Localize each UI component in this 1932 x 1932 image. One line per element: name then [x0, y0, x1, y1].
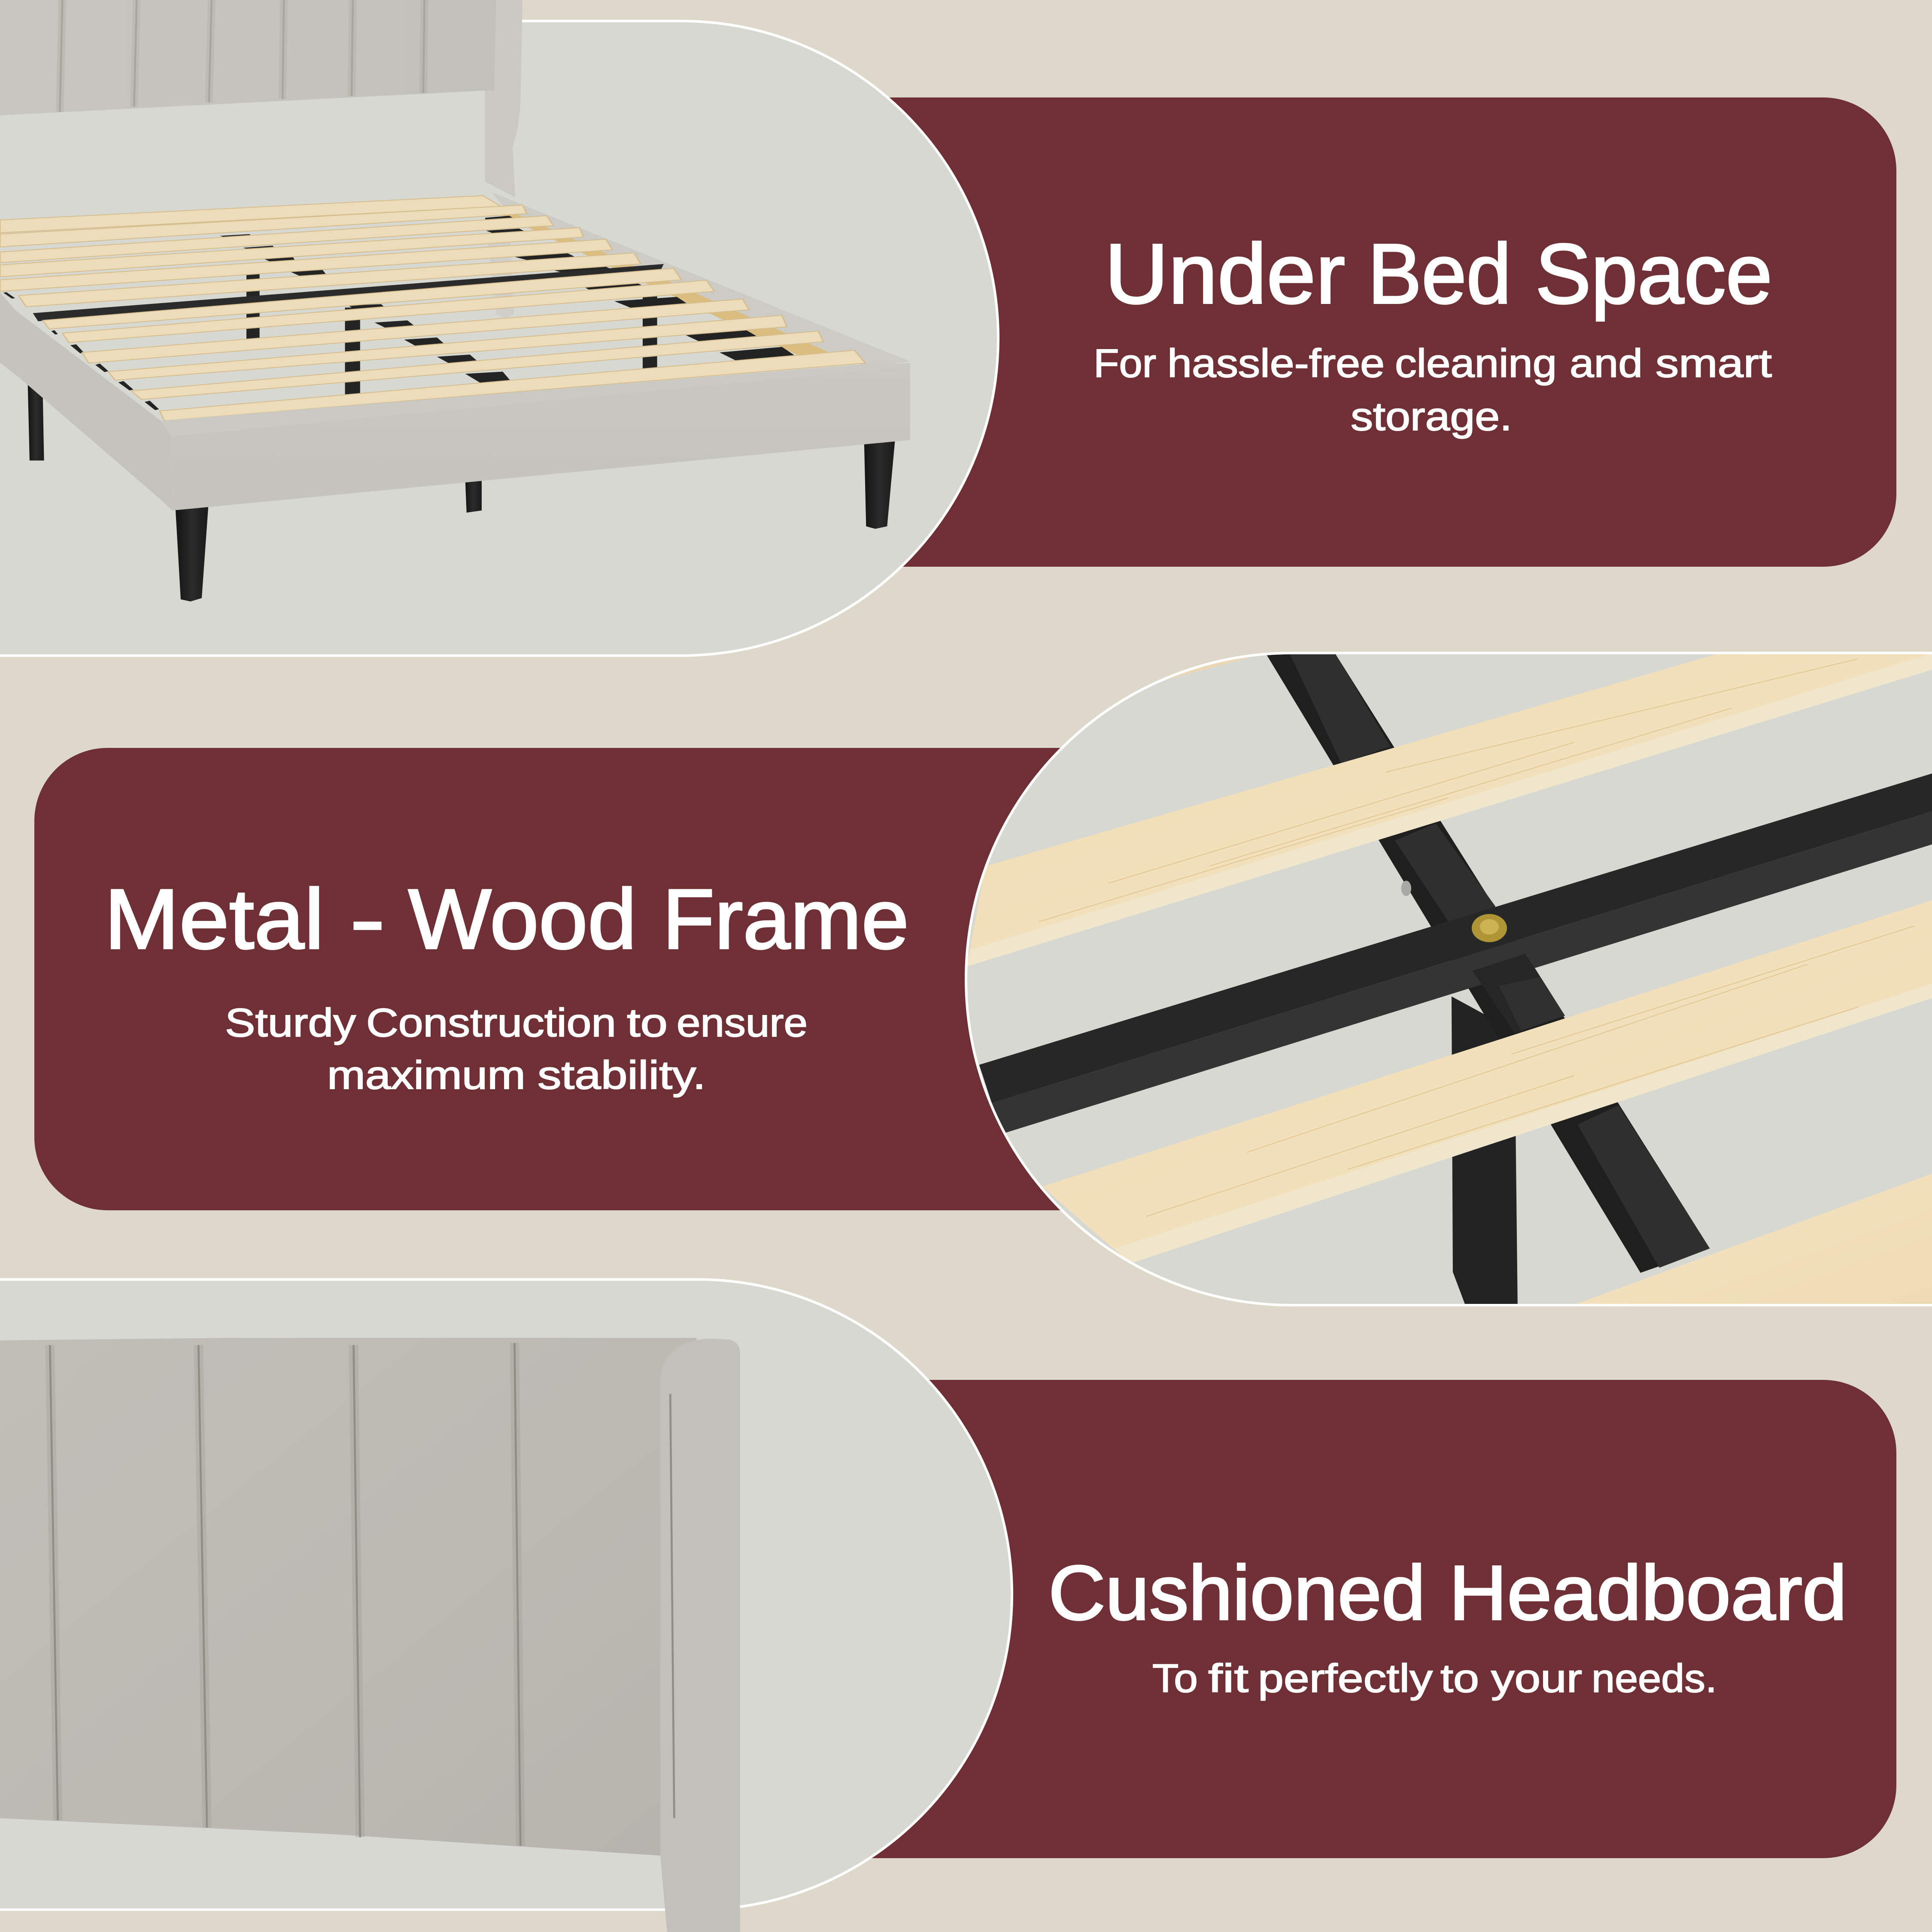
centre beam	[33, 264, 664, 321]
heading: under bed space: Under	[1105, 226, 1345, 321]
photo background	[967, 748, 1194, 1210]
panel: metal frame photo outline	[966, 653, 1932, 1305]
panel: metal frame photo	[966, 653, 1932, 1310]
headboard wing	[660, 1339, 740, 1932]
text: headboard description: your	[1491, 1656, 1582, 1701]
horizontal metal bar	[979, 773, 1932, 1133]
text: frame description line 2: maximum	[327, 1053, 526, 1097]
heading: metal wood frame: -	[350, 872, 385, 966]
top wood slat	[966, 653, 1932, 966]
heading: metal wood frame: Wood	[408, 872, 637, 966]
photo: bed frame with slats	[0, 0, 910, 601]
heading: under bed space	[1105, 226, 1772, 321]
front rail top surface	[161, 363, 910, 436]
side rail left	[0, 293, 172, 510]
text: headboard description: to	[1440, 1656, 1479, 1701]
dark rail blocks	[485, 216, 799, 362]
text: frame description line 1: ensure	[677, 1000, 808, 1045]
text: under bed description line 2: storage.	[1351, 394, 1512, 439]
headboard post lower	[484, 212, 514, 318]
text: headboard description: perfectly	[1258, 1656, 1433, 1701]
text: under bed description line 1	[1094, 341, 1772, 386]
diagonal metal bar	[1266, 653, 1710, 1273]
front rail	[171, 367, 910, 510]
wooden slats	[0, 196, 866, 421]
wood inner rail	[489, 210, 829, 355]
heading: metal wood frame	[104, 872, 909, 966]
panel: metal wood frame red card	[34, 748, 1194, 1210]
channel seams soft shading	[50, 1343, 520, 1846]
heading: under bed space: Bed	[1368, 226, 1511, 321]
heading: cushioned headboard	[1048, 1550, 1847, 1636]
bottom wood slat	[1558, 1174, 1932, 1310]
text: under bed description line 1: cleaning	[1395, 341, 1557, 386]
panel: under bed space red card	[773, 97, 1896, 567]
middle wood slat	[1042, 900, 1932, 1264]
heading: metal wood frame: Frame	[662, 872, 909, 966]
side rail right	[492, 192, 910, 367]
icon: gold bolt	[1472, 914, 1507, 942]
text: frame description line 1: Construction	[366, 1000, 616, 1045]
panel: cushioned headboard red card	[773, 1380, 1896, 1858]
heading: cushioned headboard: Cushioned	[1048, 1550, 1425, 1636]
text: headboard description: needs.	[1592, 1656, 1717, 1701]
text: under bed description line 1: and	[1570, 341, 1643, 386]
text: under bed description line 1: smart	[1656, 341, 1772, 386]
velcro strip	[1499, 977, 1565, 1030]
channel seams	[50, 1343, 520, 1846]
text: frame description line 2	[327, 1053, 706, 1097]
heading: cushioned headboard: Headboard	[1449, 1550, 1847, 1636]
text: under bed description line 1: For	[1094, 341, 1156, 386]
icon: small screw	[1401, 881, 1411, 896]
text: frame description line 1	[225, 1000, 808, 1045]
headboard panel	[0, 1338, 696, 1903]
heading: metal wood frame: Metal	[104, 872, 324, 966]
small slat sliver	[1152, 653, 1266, 683]
photo: upholstered headboard	[0, 1338, 740, 1932]
heading: under bed space: Space	[1535, 226, 1772, 321]
wing seam	[670, 1394, 674, 1818]
text: headboard description: fit	[1208, 1656, 1249, 1701]
text: under bed description line 1: hassle-free	[1167, 341, 1385, 386]
vertical leg	[1452, 996, 1518, 1310]
bracket over bar	[1472, 954, 1565, 1033]
text: frame description line 1: Sturdy	[225, 1000, 356, 1045]
bed legs	[27, 378, 895, 601]
headboard	[0, 0, 522, 197]
panel: bed photo background	[0, 21, 998, 656]
text: headboard description: To	[1152, 1656, 1198, 1701]
metal supports	[3, 212, 657, 410]
text: frame description line 1: to	[627, 1000, 668, 1045]
text: headboard description	[1152, 1656, 1717, 1701]
panel: headboard photo background	[0, 1279, 1012, 1910]
text: frame description line 2: stability.	[538, 1053, 706, 1097]
